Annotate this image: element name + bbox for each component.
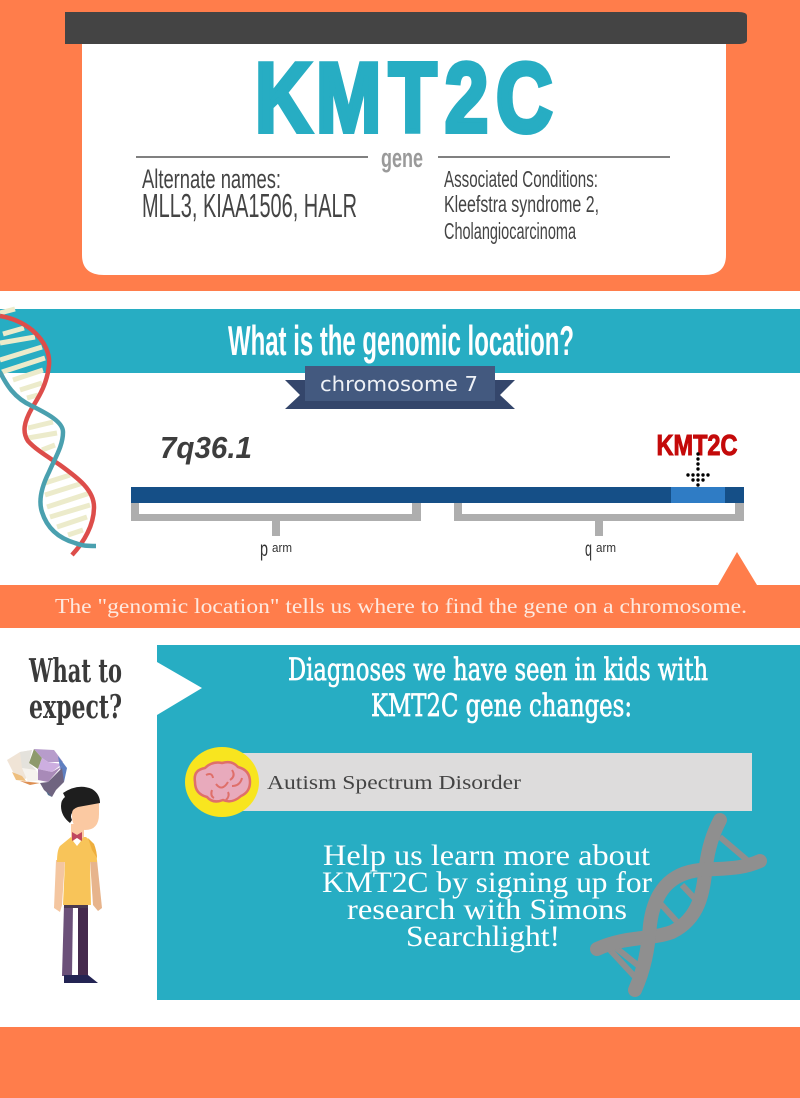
- associated conditions: Cholangiocarcinoma: [444, 218, 576, 244]
- subtitle: gene: gene: [381, 143, 423, 173]
- icon: dna helix left: [0, 309, 96, 555]
- dark top bar: [65, 12, 747, 44]
- associated conditions: Kleefstra syndrome 2,: [444, 191, 599, 217]
- heading: what to expect: expect?: [29, 687, 122, 726]
- callout: genomic location definition: [0, 552, 800, 628]
- gene label: KMT2C: [656, 430, 738, 462]
- alternate names: [142, 164, 357, 224]
- heading: what to expect: What to: [28, 651, 122, 690]
- call to action: research with Simons: [347, 893, 627, 926]
- call to action: [322, 839, 652, 953]
- ribbon: chromosome 7: chromosome 7: [320, 372, 478, 396]
- heading: diagnoses: [288, 652, 708, 724]
- diagnosis item: autism: Autism Spectrum Disorder: [267, 772, 521, 794]
- arms: [54, 860, 65, 912]
- ribbon: chromosome 7: [285, 366, 515, 409]
- heading: what to expect: [28, 651, 122, 726]
- alternate names: Alternate names:: [142, 164, 281, 194]
- title: KMT2C: [255, 43, 553, 152]
- icon: polygon brain: [7, 749, 67, 797]
- heading: diagnoses: KMT2C gene changes:: [371, 688, 632, 724]
- face: [72, 800, 99, 830]
- footer band: [0, 1027, 800, 1098]
- hair: [61, 787, 100, 823]
- associated conditions: Associated Conditions:: [444, 166, 598, 192]
- illustration: person: [54, 787, 102, 983]
- panel: diagnoses: [157, 645, 800, 1000]
- bracket: p arm: p: [260, 538, 268, 561]
- associated conditions: [444, 166, 599, 244]
- bracket: q arm: arm: [596, 540, 616, 555]
- bracket: q arm: [454, 503, 744, 561]
- call to action: KMT2C by signing up for: [322, 866, 652, 899]
- panel: header: [0, 0, 800, 291]
- neck and bow: [71, 824, 84, 843]
- bracket: p arm: [131, 503, 421, 561]
- call to action: Help us learn more about: [323, 839, 651, 872]
- diagnosis item: autism: [185, 747, 752, 817]
- arrow: dotted pointer: [686, 452, 710, 487]
- white card: [82, 30, 726, 275]
- icon: grey dna: [597, 820, 760, 990]
- shirt: [57, 837, 97, 905]
- cytoband label: 7q36.1: [160, 430, 252, 465]
- alternate names: MLL3, KIAA1506, HALR: [142, 187, 357, 224]
- chromosome bar: [131, 487, 744, 503]
- bracket: q arm: q: [585, 538, 592, 561]
- trousers: [62, 905, 73, 976]
- icon: brain: [195, 762, 250, 801]
- call to action: Searchlight!: [406, 920, 560, 953]
- callout: genomic location definition: The "genomic location" tells us where to find the gene on a chromosome.: [55, 594, 747, 618]
- panel: genomic location banner: [0, 309, 800, 373]
- bracket: p arm: arm: [272, 540, 292, 555]
